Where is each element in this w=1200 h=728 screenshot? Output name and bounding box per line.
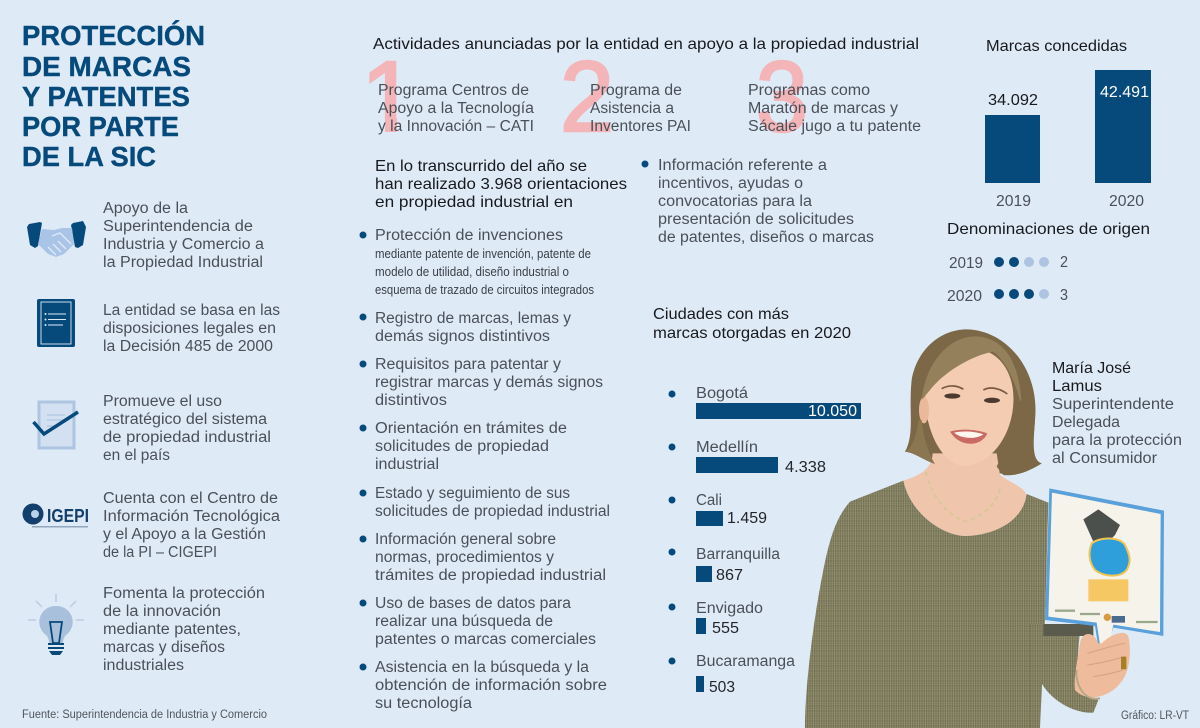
city: Cali: Cali: [696, 492, 722, 509]
heading: cities: Ciudades con más: [653, 306, 789, 323]
activity 3: Sácale jugo a tu patente: [748, 118, 921, 135]
face: [925, 348, 1013, 466]
activity 2: [590, 82, 691, 135]
row 2019: 2019: [949, 255, 983, 272]
activity 3: Programas como: [748, 82, 870, 99]
city: Bucaramanga: Bucaramanga: [696, 653, 795, 670]
list item 8: Asistencia en la búsqueda y la: [375, 659, 589, 676]
city: Bogotá: [668, 385, 861, 420]
list item 9: incentivos, ayudas o: [658, 175, 803, 192]
title: POR PARTE: [22, 111, 179, 142]
heading: cities: marcas otorgadas en 2020: [653, 325, 851, 342]
city: Barranquilla: [668, 546, 780, 584]
source note: Fuente: Superintendencia de Industria y Comercio: [22, 709, 267, 721]
bar 2020: [1095, 70, 1151, 210]
list item 4: [360, 420, 567, 473]
heading: orientations: han realizado 3.968 orientaciones: [375, 176, 627, 193]
heading: activities: Actividades anunciadas por la entidad en apoyo a la propiedad industrial: [373, 36, 919, 53]
list item 1: Protección de invenciones: [375, 227, 563, 244]
text: entidad: La entidad se basa en las: [103, 302, 280, 319]
list item 1: esquema de trazado de circuitos integrados: [375, 283, 594, 297]
activity 3: [748, 82, 921, 135]
text: promueve: en el país: [103, 447, 170, 464]
city: Bucaramanga: [668, 653, 795, 696]
list item 1: mediante patente de invención, patente de: [375, 247, 591, 261]
text: cuenta: y el Apoyo a la Gestión: [103, 526, 266, 543]
eyes: [942, 386, 1007, 403]
text: apoyo: [103, 200, 264, 271]
activity 2: Asistencia a: [590, 100, 674, 117]
numeral 3: 3: [756, 41, 808, 153]
sign board: [1045, 488, 1164, 647]
text: promueve: [103, 393, 271, 464]
panel: activities: [369, 38, 920, 134]
panel: marcas concedidas chart: [985, 38, 1151, 210]
sign: logos: [1055, 611, 1158, 622]
panel: left column of roles: [22, 200, 280, 674]
sign: dark hand: [1083, 509, 1120, 545]
city: Cali: [668, 492, 767, 527]
caption: María José Lamus: Lamus: [1052, 378, 1102, 395]
numeral 2: 2: [560, 41, 614, 153]
text: entidad: [103, 302, 280, 355]
hair back: [905, 329, 1042, 474]
activity 1: Programa Centros de: [378, 82, 529, 99]
list item 3: registrar marcas y demás signos: [375, 374, 603, 391]
city: Bucaramanga: 503: [709, 679, 735, 696]
sign: yellow label: [1088, 579, 1128, 601]
text: fomenta: marcas y diseños: [103, 639, 225, 656]
heading: cities: [653, 306, 851, 342]
city: Envigado: Envigado: [696, 600, 763, 617]
title: DE LA SIC: [22, 141, 156, 172]
hair side left: [905, 420, 935, 464]
hair side right: [997, 397, 1042, 475]
text: fomenta: Fomenta la protección: [103, 585, 265, 602]
panel: orientations: [360, 157, 874, 712]
list item 4: industrial: [375, 456, 439, 473]
list item 5: [360, 485, 610, 520]
list item 9: convocatorias para la: [658, 193, 812, 210]
heading: orientations: [375, 158, 627, 211]
icon: handshake: [27, 221, 86, 257]
bracelet: [1076, 670, 1100, 699]
icon: CIGEPI logo: [22, 504, 89, 528]
heading: denominaciones: Denominaciones de origen: [947, 221, 1150, 238]
bar 2020: 2020: [1109, 193, 1144, 210]
city: Envigado: [668, 600, 763, 637]
list item 6: normas, procedimientos y: [375, 549, 554, 566]
list item 6: trámites de propiedad industrial: [375, 567, 606, 584]
caption: María José Lamus: Superintendente: [1052, 396, 1174, 413]
list item 8: su tecnología: [375, 695, 472, 712]
activity 1: y la Innovación – CATI: [378, 118, 534, 135]
list item 2: demás signos distintivos: [375, 328, 550, 345]
list item 5: solicitudes de propiedad industrial: [375, 503, 610, 520]
portrait: María José Lamus holding a sign: [805, 329, 1164, 728]
text: apoyo: Apoyo de la: [103, 200, 188, 217]
title: DE MARCAS: [22, 51, 191, 82]
panel: denominaciones de origen: [947, 221, 1150, 305]
list item 3: distintivos: [375, 392, 447, 409]
text: promueve: Promueve el uso: [103, 393, 222, 410]
icon: light bulb: [28, 594, 84, 655]
list item 7: patentes o marcas comerciales: [375, 631, 596, 648]
row 2020: [947, 287, 1068, 305]
sign: blue piggy bank: [1089, 539, 1130, 576]
text: apoyo: Superintendencia de: [103, 218, 253, 235]
activity 1: [378, 82, 534, 135]
list item 1: [360, 227, 594, 297]
activity 3: Maratón de marcas y: [748, 100, 898, 117]
city: Medellín: 4.338: [785, 459, 826, 476]
credit note: Gráfico: LR-VT: [1121, 710, 1189, 722]
city: Envigado: 555: [712, 620, 739, 637]
list item 1: modelo de utilidad, diseño industrial o: [375, 265, 569, 279]
text: promueve: estratégico del sistema: [103, 411, 267, 428]
list item 7: Uso de bases de datos para: [375, 595, 571, 612]
caption: María José Lamus: para la protección: [1052, 432, 1182, 449]
row 2019: [949, 254, 1068, 272]
text: fomenta: mediante patentes,: [103, 621, 241, 638]
text: cuenta: de la PI – CIGEPI: [103, 544, 217, 561]
list item 4: Orientación en trámites de: [375, 420, 567, 437]
bar 2019: [985, 92, 1040, 210]
text: promueve: de propiedad industrial: [103, 429, 271, 446]
hand: [1075, 633, 1130, 697]
list item 9: [642, 157, 874, 246]
bar 2019: 34.092: [988, 92, 1038, 109]
icon: document: [37, 299, 75, 347]
sleeve: [1030, 623, 1098, 728]
list item 8: [360, 659, 607, 712]
row 2019: 2: [1060, 254, 1068, 271]
numeral 1: 1: [361, 41, 417, 153]
icon: CIGEPI logo: IGEPI: [47, 506, 89, 526]
list item 4: solicitudes de propiedad: [375, 438, 549, 455]
list item 6: [360, 531, 606, 584]
text: cuenta: Información Tecnológica: [103, 508, 280, 525]
caption: María José Lamus: [1052, 360, 1182, 467]
list item 7: [360, 595, 596, 648]
text: fomenta: industriales: [103, 657, 184, 674]
city: Bogotá: 10.050: [808, 403, 857, 420]
list item 6: Información general sobre: [375, 531, 556, 548]
list item 9: de patentes, diseños o marcas: [658, 229, 874, 246]
title: Y PATENTES: [22, 81, 190, 112]
text: apoyo: Industria y Comercio a: [103, 236, 264, 253]
list item 7: realizar una búsqueda de: [375, 613, 553, 630]
list item 9: Información referente a: [658, 157, 827, 174]
heading: orientations: En lo transcurrido del año se: [375, 158, 587, 175]
city: Barranquilla: Barranquilla: [696, 546, 780, 563]
caption: María José Lamus: María José: [1052, 360, 1131, 377]
title: [22, 20, 205, 172]
caption: María José Lamus: Delegada: [1052, 414, 1120, 431]
bangs: [922, 336, 1022, 407]
ring: [1121, 657, 1126, 669]
city: Medellín: [668, 439, 826, 476]
bar 2020: 42.491: [1100, 84, 1149, 101]
row 2020: 2020: [947, 288, 982, 305]
list item 9: presentación de solicitudes: [658, 211, 854, 228]
list item 3: Requisitos para patentar y: [375, 356, 561, 373]
list item 2: Registro de marcas, lemas y: [375, 310, 571, 327]
panel: cities chart: [653, 306, 861, 696]
text: fomenta: de la innovación: [103, 603, 221, 620]
bar 2019: 2019: [996, 193, 1031, 210]
sleeve shadow: [1043, 624, 1093, 636]
city: Cali: 1.459: [727, 510, 767, 527]
text: apoyo: la Propiedad Industrial: [103, 254, 263, 271]
activity 2: Inventores PAI: [590, 118, 691, 135]
mouth: [950, 430, 987, 444]
activity 2: Programa de: [590, 82, 682, 99]
city: Barranquilla: 867: [716, 567, 743, 584]
text: cuenta: [103, 490, 280, 561]
numeral 1: [369, 60, 397, 132]
list item 3: [360, 356, 603, 409]
text: cuenta: Cuenta con el Centro de: [103, 490, 278, 507]
text: entidad: la Decisión 485 de 2000: [103, 338, 273, 355]
icon: checklist: [34, 402, 78, 448]
sweater: [805, 481, 1048, 728]
ear left: [919, 397, 929, 423]
sleeve, hand and sign: [1030, 488, 1164, 728]
heading: marcas concedidas: Marcas concedidas: [986, 38, 1127, 55]
list item 2: [360, 310, 571, 345]
list item 5: Estado y seguimiento de sus: [375, 485, 570, 502]
city: Medellín: Medellín: [696, 439, 758, 456]
activity 1: Apoyo a la Tecnología: [378, 100, 534, 117]
title: PROTECCIÓN: [22, 20, 205, 51]
city: Bogotá: Bogotá: [696, 385, 748, 402]
caption: María José Lamus: al Consumidor: [1052, 450, 1157, 467]
row 2020: 3: [1060, 287, 1068, 304]
necklace: [926, 472, 1001, 522]
neck and chest: [903, 453, 1027, 536]
text: fomenta: [103, 585, 265, 674]
text: entidad: disposiciones legales en: [103, 320, 276, 337]
list item 8: obtención de información sobre: [375, 677, 607, 694]
heading: orientations: en propiedad industrial en: [375, 194, 573, 211]
